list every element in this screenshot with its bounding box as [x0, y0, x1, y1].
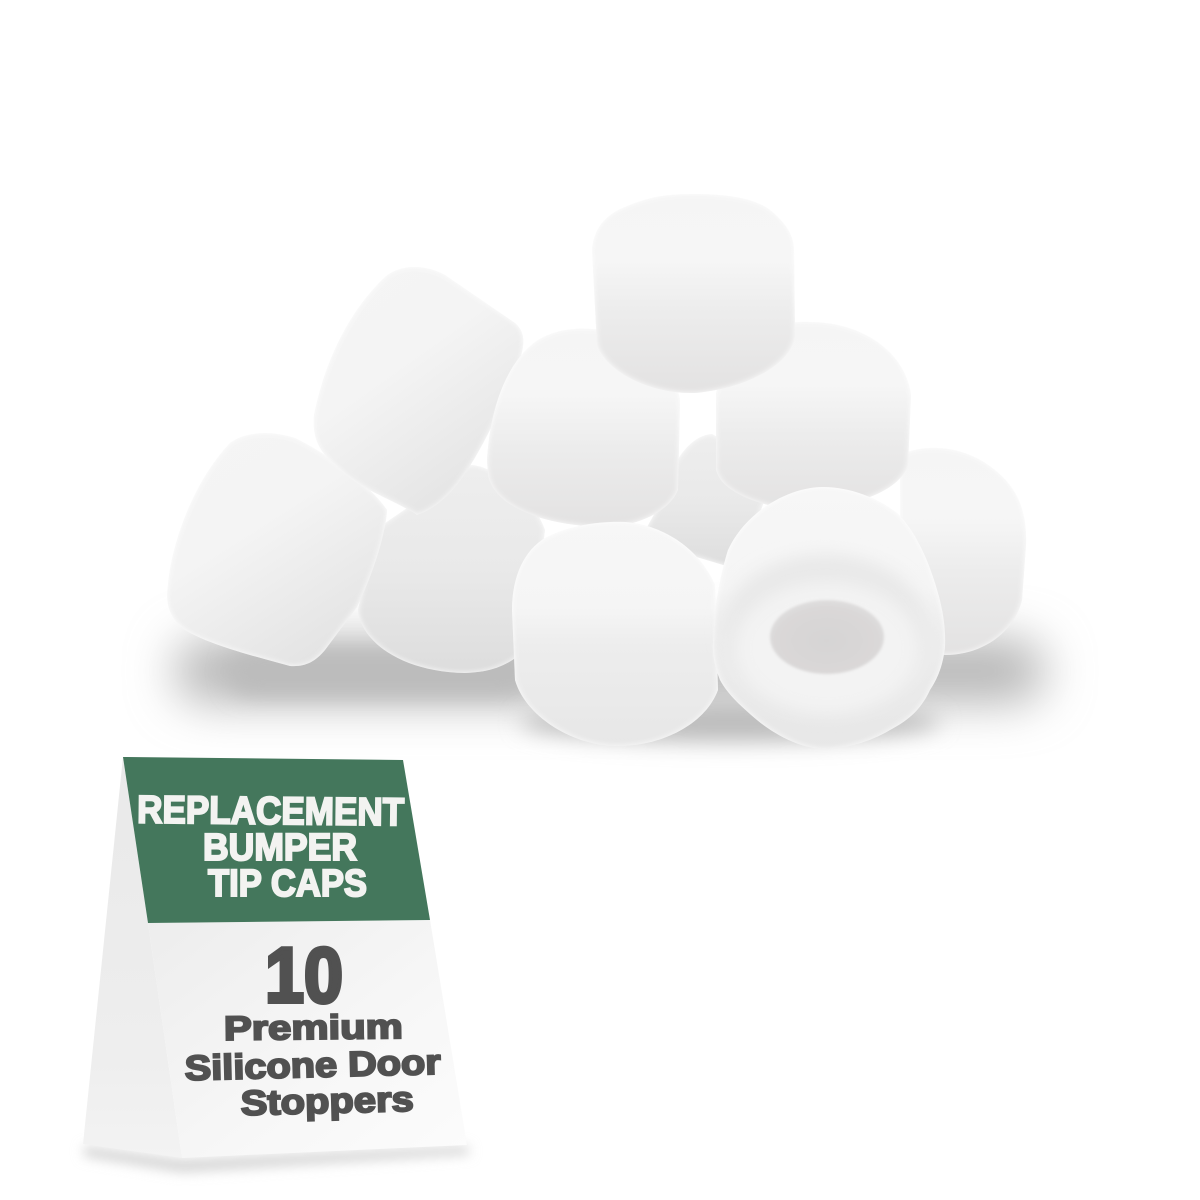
cap: behind centre [640, 434, 775, 570]
quantity: 10: 10 [265, 931, 343, 1019]
card side panel [83, 757, 182, 1158]
description: premium silicone door stoppers: Stoppers [240, 1080, 414, 1123]
tent card sign [83, 757, 470, 1172]
card front panel [148, 920, 467, 1158]
cap: upper left tilted [314, 267, 523, 515]
cap: left tilted [167, 433, 387, 666]
description: premium silicone door stoppers [184, 1008, 442, 1123]
heading: replacement bumper tip caps: BUMPER [203, 827, 357, 869]
cap: top [592, 194, 795, 393]
heading: replacement bumper tip caps: REPLACEMENT [137, 789, 405, 834]
card green header [123, 757, 430, 923]
cap: far right [900, 448, 1026, 655]
heading: replacement bumper tip caps: TIP CAPS [208, 863, 367, 905]
cap: centre [487, 329, 680, 527]
description: premium silicone door stoppers: Silicone Door [184, 1043, 442, 1088]
cap: lower left behind [358, 465, 545, 673]
heading: replacement bumper tip caps [137, 789, 405, 905]
cap: front with open hole [713, 487, 945, 749]
card ground shadow [84, 1146, 470, 1172]
cap: front middle [512, 522, 718, 746]
cast shadow under caps [175, 640, 1045, 742]
cap: upper right [716, 322, 911, 510]
description: premium silicone door stoppers: Premium [224, 1008, 403, 1048]
product: pile of ten silicone caps [167, 194, 1026, 749]
